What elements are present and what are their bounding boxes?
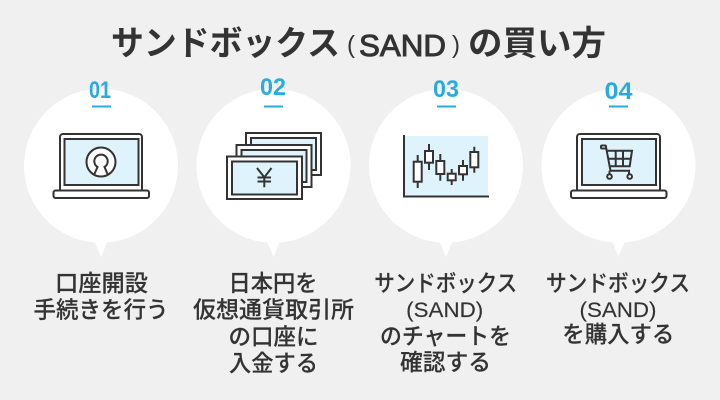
icon: yen banknotes xyxy=(227,133,321,199)
step 2 label: 仮想通貨取引所 xyxy=(193,296,354,322)
step 1 label xyxy=(34,270,168,322)
step 2 label xyxy=(193,270,354,376)
step 4 label: を購入する xyxy=(562,321,674,347)
step 2 label: 日本円を xyxy=(228,270,318,296)
speech bubble 2 xyxy=(197,89,350,257)
number 04: 04 xyxy=(604,78,633,105)
number 02: 02 xyxy=(260,74,286,101)
step 3 label: のチャートを xyxy=(380,323,511,349)
step 2 xyxy=(193,74,354,376)
step 4 label xyxy=(546,270,690,347)
icon: laptop with shopping cart xyxy=(571,134,666,198)
step 4 label: サンドボックス xyxy=(546,270,690,296)
number 01: 01 xyxy=(89,77,111,104)
icon: laptop with user xyxy=(54,134,149,198)
step 2 label: 入金する xyxy=(229,350,318,376)
title xyxy=(111,25,606,63)
step 3 label: サンドボックス xyxy=(374,270,517,296)
step 2 label: の口座に xyxy=(228,324,318,350)
icon: candlestick chart xyxy=(404,135,489,196)
speech bubble 3 xyxy=(369,89,523,257)
number underline 3 xyxy=(437,106,456,108)
title: ( xyxy=(347,31,356,59)
step 3 xyxy=(369,76,523,375)
title: の買い方 xyxy=(468,25,606,63)
step 1 label: 口座開設 xyxy=(55,270,148,296)
number underline 4 xyxy=(609,106,628,108)
step 1 label: 手続きを行う xyxy=(34,296,168,322)
speech bubble 1 xyxy=(24,89,178,257)
title: SAND xyxy=(359,28,446,63)
number 03: 03 xyxy=(433,76,459,103)
title: サンドボックス xyxy=(111,25,340,63)
number underline 1 xyxy=(92,106,111,108)
step 3 label: 確認する xyxy=(400,349,491,375)
step 3 label: (SAND) xyxy=(406,298,483,322)
step 4 label: (SAND) xyxy=(580,298,656,322)
number underline 2 xyxy=(264,106,283,108)
speech bubble 4 xyxy=(542,89,696,257)
step 1 xyxy=(24,77,178,322)
step 3 label xyxy=(374,270,517,375)
title: ) xyxy=(452,31,460,59)
step 4 xyxy=(542,78,696,347)
